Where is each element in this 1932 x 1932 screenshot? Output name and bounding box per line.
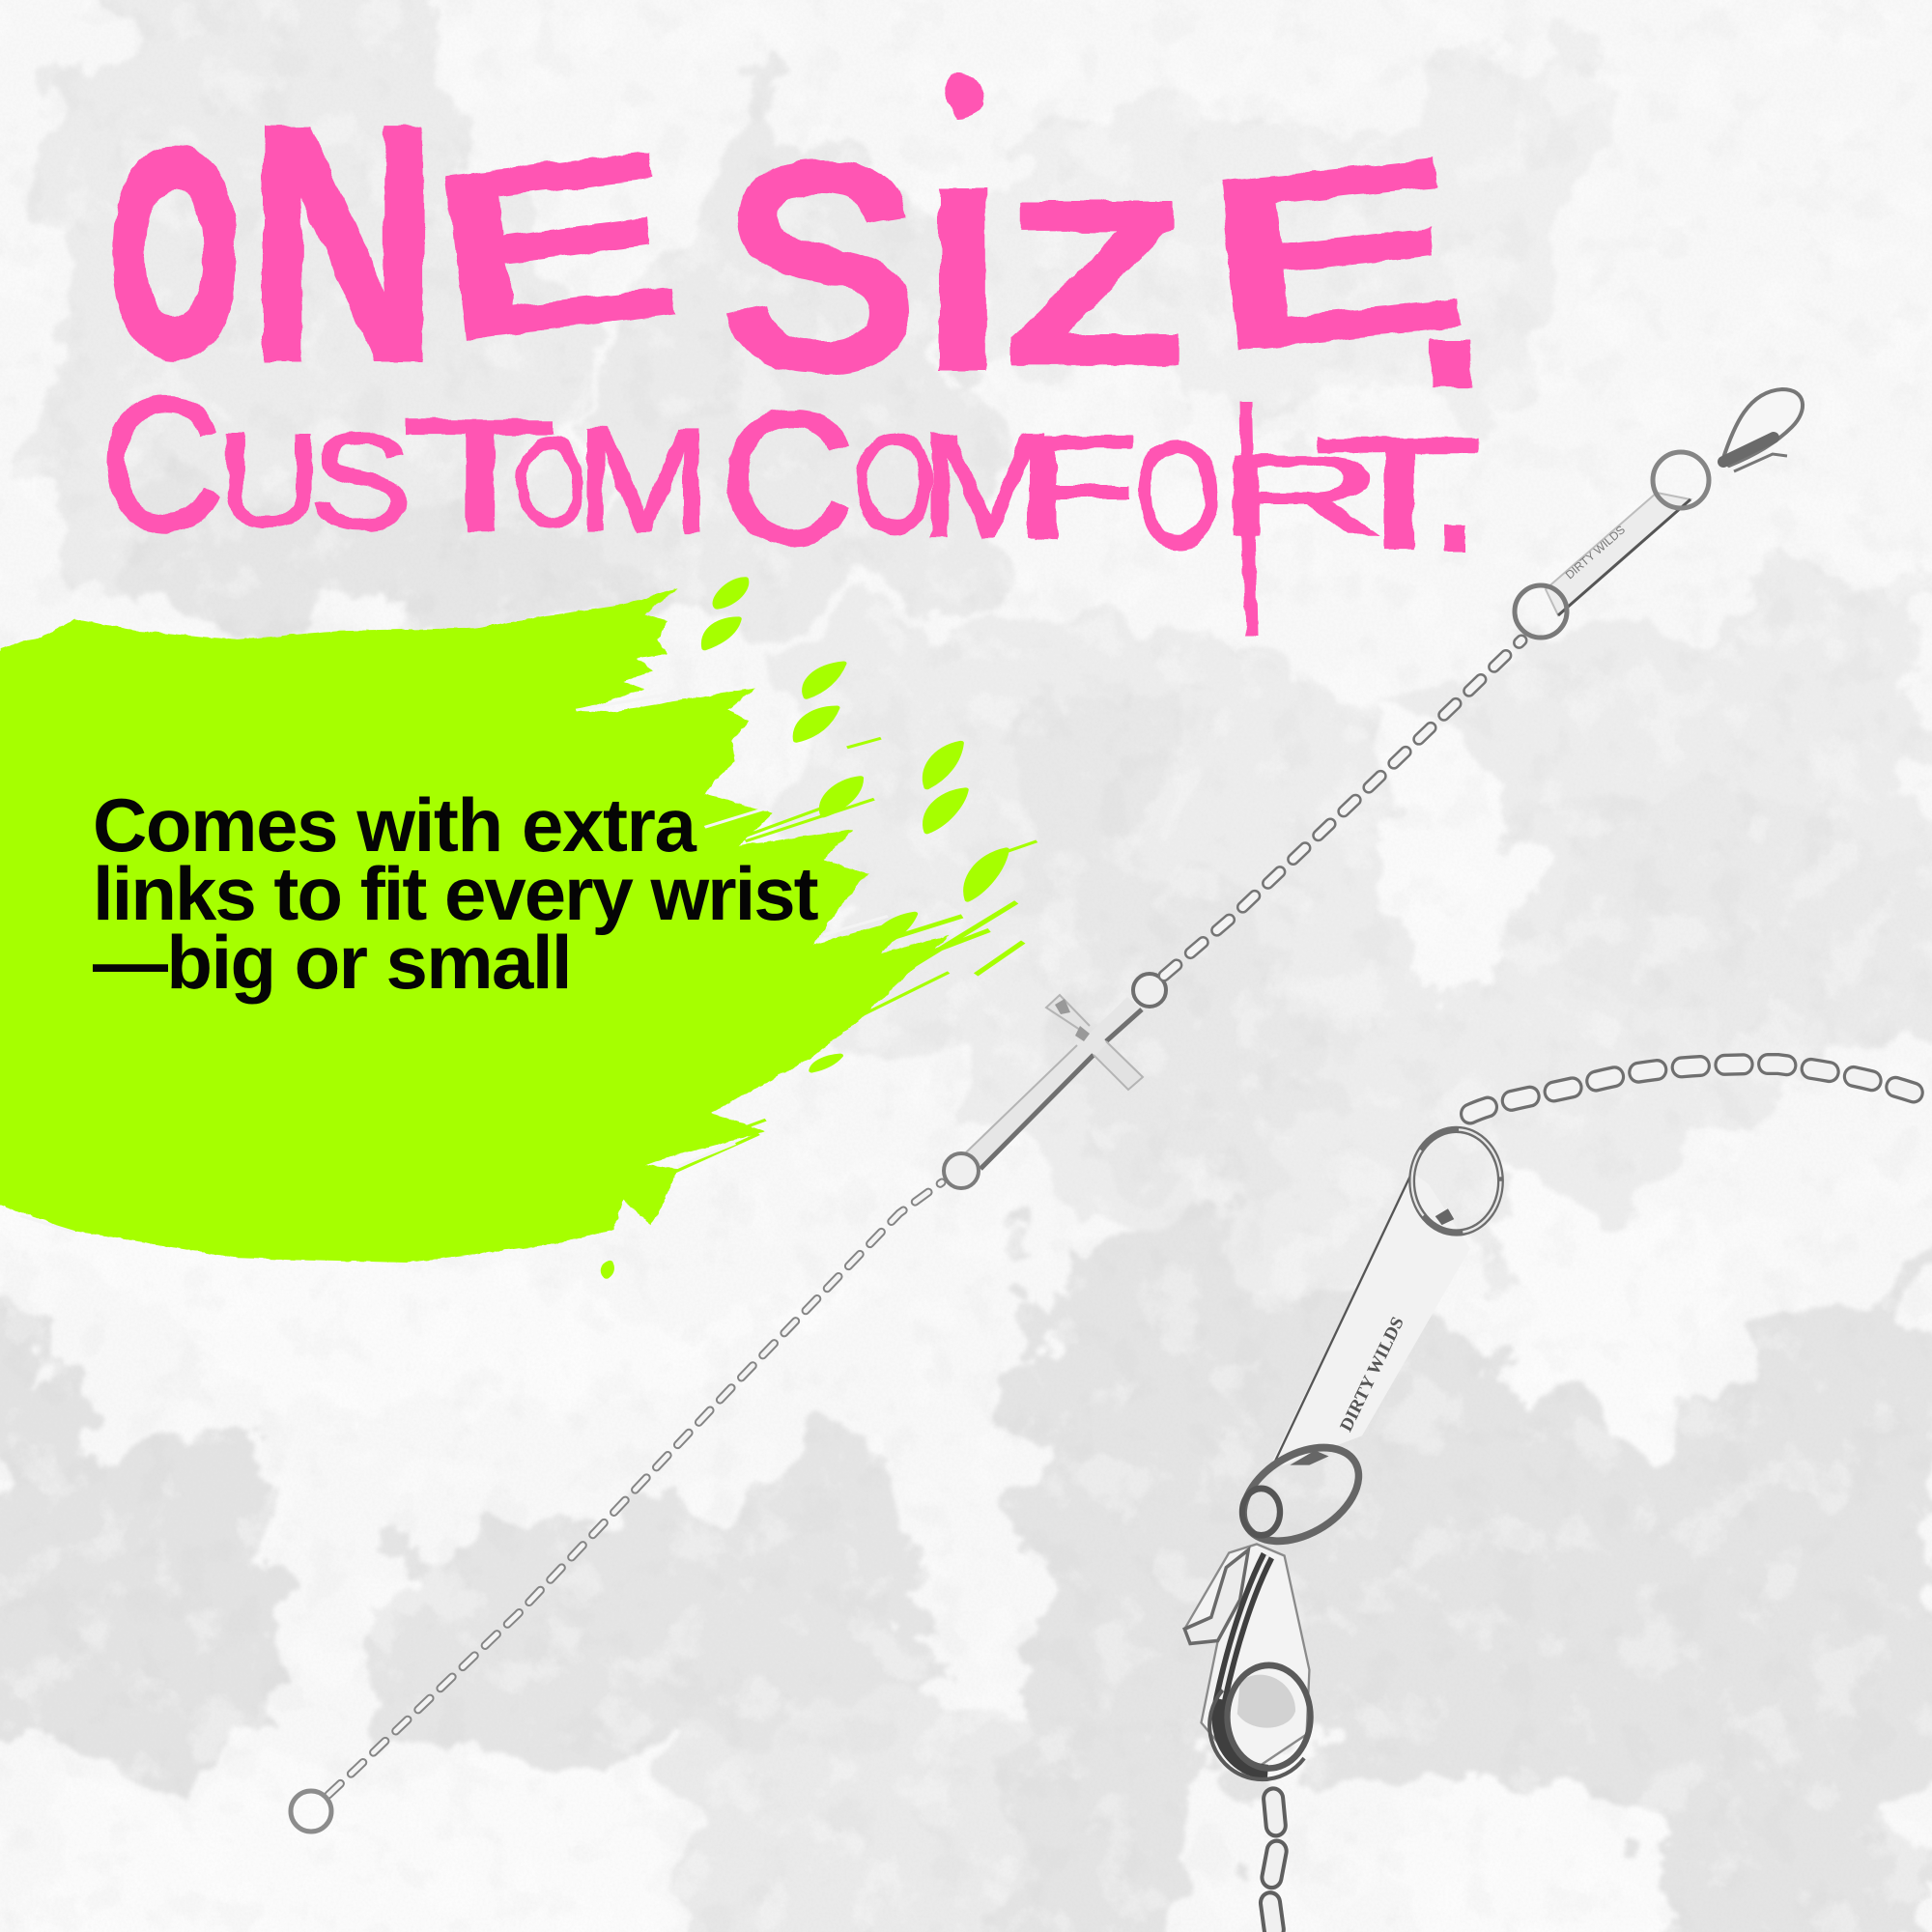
lime paint brush stroke [0,579,1037,1277]
headline: ONE SIZE.: Z [1005,155,1183,413]
headline: ONE SIZE.: E [1193,113,1472,398]
headline: ONE SIZE.: E [419,107,689,386]
bracelet: close-up of clasp and chain [1184,1065,1932,1932]
white scratches in paint [20,694,888,1233]
headline: ONE SIZE.: I [919,131,1007,430]
headline: ONE SIZE.: S [723,110,916,428]
subheadline: CUSTOM COMFORT.: C [99,359,224,571]
subheadline: CUSTOM COMFORT.: T [1315,405,1484,583]
main paint shape [0,588,949,1263]
bracelet: cross charm chain [291,389,1803,1832]
clasp ring [1227,1665,1311,1769]
subheadline: CUSTOM COMFORT.: S [310,407,412,557]
upper chain segment [1164,640,1521,976]
lower ring [1229,1429,1374,1560]
small jump ring [1242,1489,1280,1535]
copy line 3: —big or small [93,920,571,1005]
lower chain segment [328,1182,942,1795]
small clasp and tag [1515,389,1803,638]
paint droplets [604,579,1007,1277]
body copy on paint stroke [93,782,818,1005]
subheadline: CUSTOM COMFORT.: U [216,407,322,554]
headline: ONE SIZE.: O [110,94,240,414]
lobster clasp [1184,1544,1309,1776]
cross charm [944,974,1166,1188]
subheadline: CUSTOM COMFORT.: M [920,404,1057,569]
subheadline: CUSTOM COMFORT. [99,359,1484,636]
copy line 2: links to fit every wrist [93,851,817,936]
engraved tag [1270,1173,1470,1465]
subheadline: CUSTOM COMFORT.: F [1021,406,1138,571]
paint streaks [610,700,1037,1174]
small clasp and tag: DIRTY WILDS [1563,523,1628,582]
subheadline: CUSTOM COMFORT.: T [404,387,556,564]
copy line 1: Comes with extra [93,782,695,867]
end ring [291,1791,331,1832]
subheadline: CUSTOM COMFORT.: R [1216,433,1385,558]
engraved tag: DIRTY WILDS [1336,1314,1408,1435]
headline: ONE SIZE. [110,58,1485,447]
subheadline: CUSTOM COMFORT.: O [853,405,936,562]
top ring [1412,1129,1500,1233]
chain below clasp [1269,1799,1278,1932]
headline: ONE SIZE.: . [1416,127,1485,447]
close-up chain [1470,1065,1932,1114]
subheadline: CUSTOM COMFORT.: . [1437,407,1472,585]
subheadline: CUSTOM COMFORT.: O [1134,412,1221,578]
subheadline: CUSTOM COMFORT.: O [514,412,585,554]
subheadline: CUSTOM COMFORT.: C [720,373,855,584]
headline: ONE SIZE.: N [248,58,439,433]
subheadline: CUSTOM COMFORT.: M [575,399,712,564]
